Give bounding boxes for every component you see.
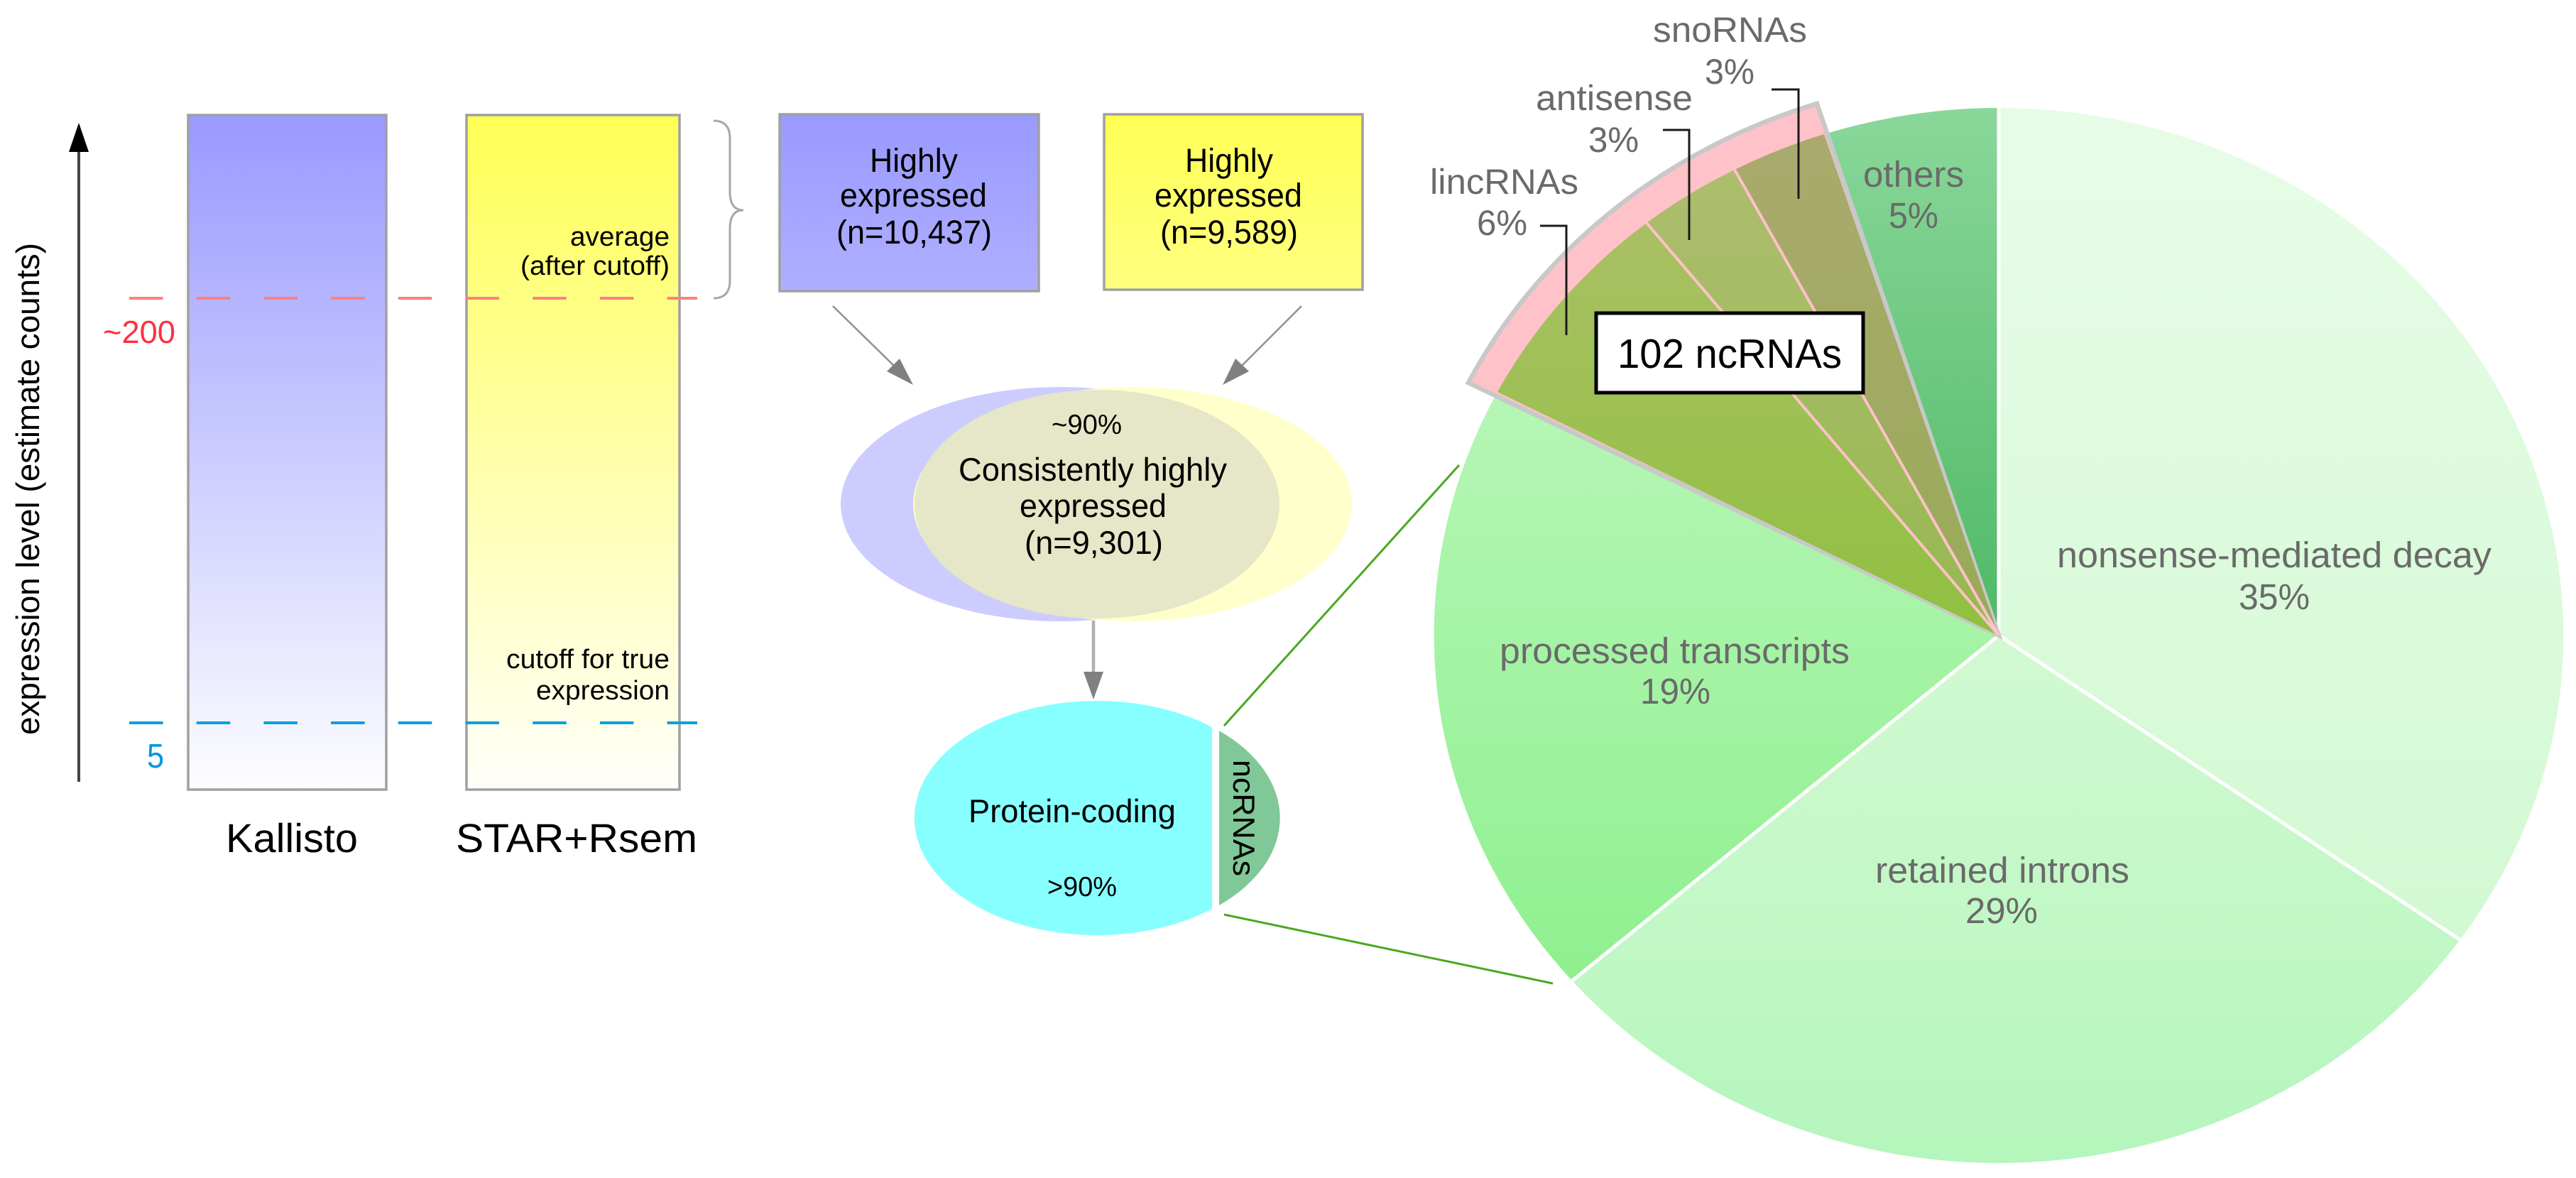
note: cutoff for true expression [506,645,670,706]
axis label: expression level (estimate counts) [9,243,46,735]
slice: nonsense-mediated decay [1999,108,2563,939]
leader lines [1540,89,1799,335]
label: lincRNAs: lincRNAs [1430,162,1578,202]
label: retained introns [1875,850,2129,931]
slice: retained introns [1572,636,2460,1163]
label: others: others [1863,154,1964,195]
label: antisense: 3% [1588,120,1639,160]
venn text [959,410,1227,561]
ellipse: protein-coding: >90% [1047,872,1117,902]
label: STAR+Rsem: STAR+Rsem [456,816,697,861]
arrow: left box to venn [833,306,913,385]
note: cutoff for true expression: expression [536,676,670,706]
highlighted ncRNA band [1468,104,1999,636]
box: STAR+Rsem highly expressed: expressed [1155,176,1302,214]
label: snoRNAs: 3% [1705,52,1754,92]
callout: 102 ncRNAs [1596,313,1863,393]
ellipse: protein-coding [915,701,1212,935]
label: others [1863,154,1964,236]
slice: processed transcripts [1434,392,1999,981]
note: average after cutoff [520,222,670,281]
venn text: ~90% [1052,410,1122,440]
label: antisense [1536,78,1693,160]
note: average after cutoff: (after cutoff) [520,251,670,281]
arrow: right box to venn [1223,306,1301,385]
value: 5: 5 [147,738,164,775]
segment: ncRNAs: ncRNAs [1226,760,1260,876]
slice separators [1571,107,2462,982]
ncRNA separators [1647,170,1999,636]
label: nonsense-mediated decay [2057,535,2492,617]
venn diagram [841,387,1352,621]
box: STAR+Rsem highly expressed [1104,114,1363,290]
note: average after cutoff: average [570,222,670,252]
label: retained introns: retained introns [1875,850,2129,890]
label: processed transcripts: processed transcripts [1500,631,1850,671]
slice: lincRNAs [1497,223,1999,636]
slice: snoRNAs [1735,134,1999,636]
box: Kallisto highly expressed: (n=10,437) [836,213,992,251]
label: antisense: antisense [1536,78,1693,118]
slice: others [1824,108,1999,636]
label: Kallisto: Kallisto [226,816,358,861]
value: ~200: ~200 [103,314,175,350]
venn text: Consistently highly [959,451,1227,488]
venn overlap [915,390,1279,618]
label: others: 5% [1889,195,1938,236]
label: nonsense-mediated decay: nonsense-mediated decay [2057,535,2492,575]
line: cutoff dashed [129,721,697,724]
label: nonsense-mediated decay: 35% [2239,577,2310,617]
slice: antisense [1647,170,1999,636]
note: cutoff for true expression: cutoff for true [506,645,670,675]
box: STAR+Rsem highly expressed: Highly [1185,141,1273,179]
label: snoRNAs [1653,10,1807,92]
label: retained introns: 29% [1965,890,2038,931]
box: Kallisto highly expressed: expressed [840,176,987,214]
ellipse: protein-coding: Protein-coding [968,792,1176,829]
venn text: expressed [1020,487,1167,524]
line: average expression dashed [129,297,697,300]
label: processed transcripts [1500,631,1850,711]
box: STAR+Rsem highly expressed: (n=9,589) [1160,213,1298,251]
label: snoRNAs: snoRNAs [1653,10,1807,50]
connector lines to pie [1224,465,1553,983]
callout: 102 ncRNAs: 102 ncRNAs [1617,331,1842,377]
axis arrow [69,123,89,782]
bar: Kallisto [188,115,386,790]
brace [714,121,743,298]
segment: ncRNAs [1219,731,1280,905]
label: processed transcripts: 19% [1640,671,1710,711]
pie chart [1430,10,2563,1163]
panel: expression level bars [9,115,743,861]
label: lincRNAs: 6% [1477,203,1527,243]
bar: STAR+Rsem [466,115,680,790]
label: lincRNAs [1430,162,1578,243]
venn text: (n=9,301) [1025,524,1163,561]
box: Kallisto highly expressed: Highly [870,141,958,179]
box: Kallisto highly expressed [780,114,1039,291]
arrow: venn to protein-coding [1084,621,1103,699]
